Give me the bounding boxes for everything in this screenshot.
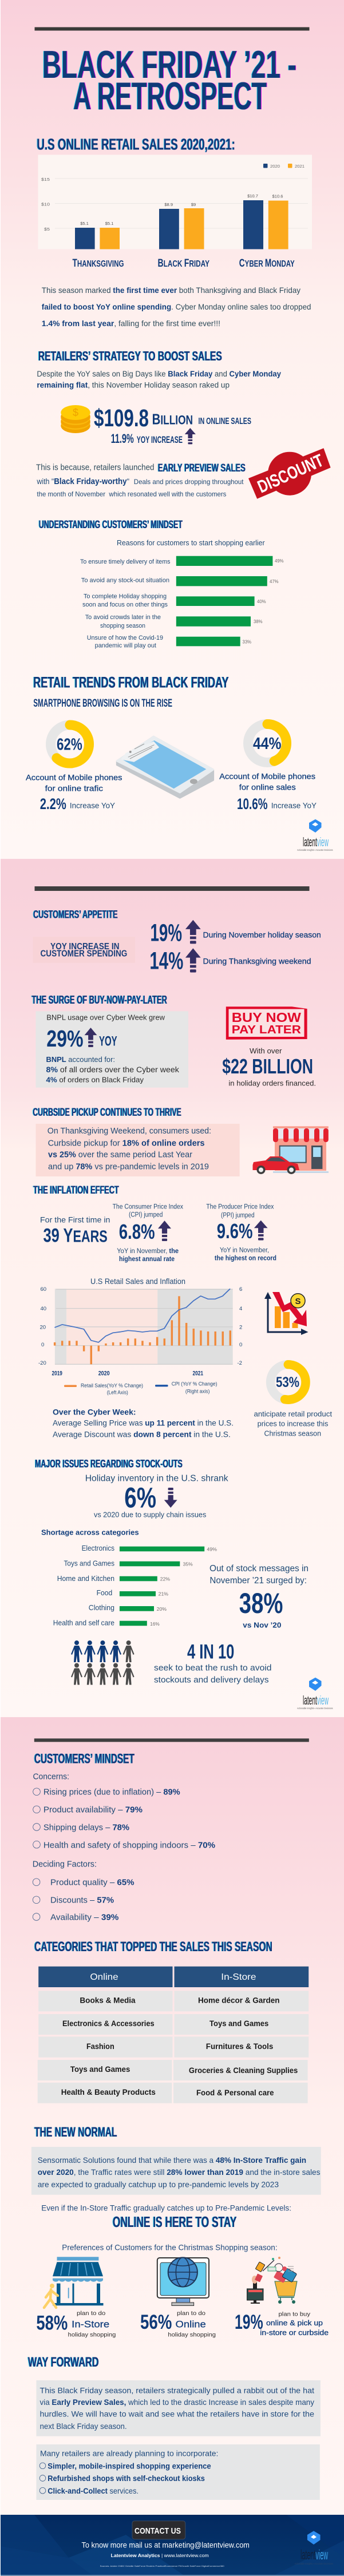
list: deciding factors: Deciding Factors: xyxy=(33,1860,97,1869)
panel: way forward xyxy=(28,2355,321,2500)
table xyxy=(38,1967,309,2103)
text panel: next Black Friday season. xyxy=(40,2422,127,2431)
stat: 19%: 19% xyxy=(150,919,182,946)
logo: latentview xyxy=(295,2531,333,2565)
bar chart: reasons: 33% xyxy=(243,640,251,645)
text: mobile sales: 10.6% xyxy=(237,795,268,813)
table: Groceries & Cleaning Supplies xyxy=(189,2066,298,2075)
list: concerns: Shipping delays – 78% xyxy=(44,1823,129,1832)
text panel: Curbside pickup for 18% of online orders xyxy=(48,1139,205,1148)
text panel: On Thanksgiving Weekend, consumers used: xyxy=(48,1127,211,1136)
text panel: retailer plans xyxy=(36,2444,320,2500)
text block: early preview sales: with "Black Friday-worthy" xyxy=(36,477,129,486)
list: concerns: Health and safety of shopping indoors – 70% xyxy=(44,1841,215,1850)
logo: latentview xyxy=(297,1678,333,1710)
callout: ONLINE IS HERE TO STAY xyxy=(113,2213,237,2230)
callout: YOY INCREASE IN xyxy=(50,942,119,952)
text panel xyxy=(31,2147,321,2195)
logo: latentview: Actionable Insights ▪ Accurate Decisions xyxy=(297,1707,333,1710)
bar chart: shortages: 22% xyxy=(160,1577,170,1582)
panel: categories table xyxy=(34,1939,309,2103)
text: mobile sales xyxy=(219,772,317,813)
table: Online xyxy=(90,1972,118,1982)
list: concerns xyxy=(33,1772,215,1850)
stat: 22 billion: $22 BILLION xyxy=(222,1055,313,1078)
table: Health & Beauty Products xyxy=(61,2087,156,2097)
text block: Despite the YoY sales on Big Days like Black Friday and Cyber Monday xyxy=(37,370,281,378)
legend xyxy=(263,164,305,169)
stat: 22 billion xyxy=(222,1047,316,1087)
table: Toys and Games xyxy=(209,2019,268,2028)
text: mobile traffic: 2.2% xyxy=(40,795,66,813)
stat: CPI xyxy=(113,1203,183,1263)
logo: latentview xyxy=(297,819,333,851)
stat: 19%: During November holiday season xyxy=(203,930,321,940)
text panel: retailer plans: Simpler, mobile-inspired shopping experience xyxy=(48,2462,211,2471)
legend: 2020 xyxy=(270,164,280,169)
logo: latentview: Actionable Insights ▪ Accurate Decisions xyxy=(295,2562,333,2565)
stat: 14% xyxy=(149,947,311,974)
text block: 1.4% from last year, falling for the first time ever!!! xyxy=(42,319,220,328)
stat: 109.8 billion: YOY INCREASE xyxy=(137,435,183,445)
text panel: YOY xyxy=(99,1033,117,1049)
text panel: retailer plans: Many retailers are already planning to incorporate: xyxy=(40,2448,218,2458)
bar chart: $5 xyxy=(44,227,50,232)
stat: out of stock messages: 38% xyxy=(239,1587,283,1619)
page background: section 1 xyxy=(1,0,344,859)
stat: 4 in 10: 4 IN 10 xyxy=(187,1640,234,1663)
bar chart: reasons xyxy=(80,556,284,649)
stat: pick up: 19% xyxy=(235,2311,263,2333)
panel: the new normal xyxy=(31,2125,329,2338)
donut: 62% xyxy=(50,725,89,763)
text panel: retailer plans: Click-and-Collect services. xyxy=(48,2486,139,2495)
heading: RETAIL TRENDS FROM BLACK FRIDAY xyxy=(33,673,229,691)
stat: 4 in 10: stockouts and delivery delays xyxy=(154,1676,269,1685)
stat: pick up: plan to buy xyxy=(278,2311,311,2317)
footer xyxy=(1,2515,344,2576)
text: mobile sales: for online sales xyxy=(239,782,296,791)
stat: out of stock messages xyxy=(209,1564,309,1629)
stat: 109.8 billion: $109.8 xyxy=(94,405,149,432)
page background: section 2 xyxy=(1,859,344,1717)
bar chart: CYBER MONDAY xyxy=(239,257,295,270)
text block: failed to boost YoY online spending. Cyber Monday online sales too dropped xyxy=(42,302,311,311)
stat: PPI: YoY in November, xyxy=(220,1247,269,1254)
icon: smartphone xyxy=(117,736,213,798)
bar chart: shortages: 20% xyxy=(157,1607,167,1612)
text block: This season marked the first time ever both Thanksgiving and Black Friday xyxy=(42,286,300,295)
logo: latentview: latentview xyxy=(303,1693,329,1707)
text panel: over 2020, the Traffic rates were still 28% lower than 2019 and the in-store sales xyxy=(38,2167,320,2177)
text panel: 29% xyxy=(46,1025,84,1052)
stat: pick up xyxy=(235,2311,329,2337)
text block: early preview sales xyxy=(36,462,246,498)
bar chart: $10.7 xyxy=(247,193,258,199)
table: Toys and Games xyxy=(70,2064,130,2074)
text panel: hurdles. We will have to wait and see what the retailers have in store for the xyxy=(40,2409,314,2419)
stat: CPI: 6.8% xyxy=(119,1220,155,1243)
bar chart: reasons: 47% xyxy=(270,579,279,584)
table: Fashion xyxy=(86,2042,114,2051)
donut: 44%: 44% xyxy=(253,735,282,753)
stat: inventory: vs 2020 due to supply chain issues xyxy=(94,1511,206,1519)
bar chart: shortages: Food xyxy=(97,1589,112,1597)
list: concerns: Concerns: xyxy=(33,1772,69,1781)
chart: retail sales and inflation: 0 xyxy=(239,1342,242,1348)
panel: buy now pay later xyxy=(32,993,316,1088)
text panel: 4% of orders on Black Friday xyxy=(46,1076,144,1084)
chart: retail sales and inflation: 6 xyxy=(239,1286,242,1293)
stat: PPI: The Producer Price Index xyxy=(206,1204,274,1211)
list: concerns: Rising prices (due to inflation) – 89% xyxy=(44,1788,180,1797)
bar chart: reasons: To avoid crowds later in the xyxy=(85,614,161,621)
stat: 39 years xyxy=(40,1215,110,1247)
chart: retail sales and inflation: 60 xyxy=(40,1286,46,1293)
text panel: via Early Preview Sales, which led to the drastic Increase in sales despite many xyxy=(40,2397,314,2407)
icon: falling chart with coin: S xyxy=(295,1297,301,1306)
button: contact us xyxy=(132,2521,185,2539)
legend: Retail Sales(YoY % Change) xyxy=(81,1382,143,1388)
text panel xyxy=(35,1011,188,1088)
stat: in-store: holiday shopping xyxy=(68,2331,116,2338)
bar chart: BLACK FRIDAY xyxy=(158,257,209,270)
chart: retail sales and inflation: 40 xyxy=(40,1306,46,1312)
text: cyber week xyxy=(53,1408,234,1438)
text panel: BNPL usage over Cyber Week grew xyxy=(46,1013,165,1022)
list: deciding factors: Discounts – 57% xyxy=(50,1896,114,1905)
stat: in-store: plan to do xyxy=(77,2310,105,2317)
stat: in-store xyxy=(36,2310,116,2338)
table: Furnitures & Tools xyxy=(206,2042,273,2051)
callout xyxy=(33,937,135,963)
stat: PPI: 9.6% xyxy=(217,1219,253,1243)
panel: retail trends xyxy=(26,673,333,851)
icon: discount stamp xyxy=(248,448,331,499)
subheading: SMARTPHONE BROWSING IS ON THE RISE xyxy=(33,697,172,710)
legend xyxy=(64,1381,218,1396)
donut: 62%: 62% xyxy=(57,736,82,754)
stat: CPI: YoY in November, the xyxy=(117,1248,179,1255)
bar chart: $5.1 xyxy=(105,221,113,226)
text: anticipate prices: Christmas season xyxy=(264,1429,321,1437)
bar chart: shortages: Clothing xyxy=(89,1604,114,1612)
text panel xyxy=(35,1124,240,1176)
heading: CUSTOMERS’ MINDSET xyxy=(34,1751,135,1767)
text block: early preview sales: Deals and prices dropping throughout xyxy=(134,478,244,486)
table: Home décor & Garden xyxy=(198,1996,279,2005)
bar chart xyxy=(38,154,312,270)
bar chart: shortages: Electronics xyxy=(82,1544,114,1552)
stat: inventory: 6% xyxy=(124,1481,156,1513)
heading: WAY FORWARD xyxy=(28,2355,99,2370)
donut: 53%: 53% xyxy=(276,1374,299,1390)
stat: out of stock messages: vs Nov ’20 xyxy=(243,1620,281,1629)
heading: THE NEW NORMAL xyxy=(34,2125,117,2140)
bar chart: $8.9 xyxy=(164,202,173,207)
bar chart: reasons: 40% xyxy=(257,599,266,604)
text panel: Sensormatic Solutions found that while there was a 48% In-Store Traffic gain xyxy=(38,2155,306,2165)
bar chart: reasons: 38% xyxy=(254,619,263,624)
stat: CPI: (CPI) jumped xyxy=(129,1212,163,1219)
chart: retail sales and inflation: -2 xyxy=(237,1360,242,1366)
chart: retail sales and inflation: 20 xyxy=(40,1325,46,1331)
text block: early preview sales: This is because, retailers launched xyxy=(36,463,155,473)
sources: Sources: Adobe CNBC Deloitte SaleForce Reuters PracticalEcommerce F5Growth SaleForce DigitalCommerce360 xyxy=(100,2565,224,2567)
icon: buy now pay later stamp: PAY LATER xyxy=(232,1023,301,1036)
stat: online: Online xyxy=(175,2319,206,2329)
chart: retail sales and inflation: 0 xyxy=(41,1342,44,1348)
company line: Latentview Analytics | www.latentview.com xyxy=(111,2553,209,2558)
text: anticipate prices: prices to increase this xyxy=(258,1420,328,1428)
icon: coin stack: $ xyxy=(73,407,78,418)
heading: U.S ONLINE RETAIL SALES 2020,2021: xyxy=(37,135,235,153)
stat: in-store: 58% xyxy=(36,2312,68,2335)
stat: 39 years: 39 YEARS xyxy=(44,1225,108,1247)
panel: customers' mindset xyxy=(33,1738,309,1923)
bar chart: $10.6 xyxy=(272,193,283,199)
bar chart: shortages: Home and Kitchen xyxy=(57,1575,114,1583)
icon: coin stack xyxy=(61,405,90,433)
icon: online shopping cart xyxy=(247,2257,297,2304)
bar chart: THANKSGIVING xyxy=(72,257,124,270)
icon: online monitor xyxy=(157,2257,209,2306)
legend: (Right axis) xyxy=(185,1388,209,1394)
icon: falling chart with coin xyxy=(264,1292,308,1335)
legend: CPI (YoY % Change) xyxy=(172,1381,218,1387)
heading: CURBSIDE PICKUP CONTINUES TO THRIVE xyxy=(33,1106,181,1119)
list: concerns: Product availability – 79% xyxy=(44,1806,143,1815)
chart: retail sales and inflation: 2020 xyxy=(98,1370,110,1377)
bar chart: shortages: Health and self care xyxy=(53,1619,114,1627)
legend: 2021 xyxy=(295,164,305,169)
bar chart: reasons: shopping season xyxy=(100,623,145,629)
text: mobile traffic: Account of Mobile phones xyxy=(26,772,122,782)
bar chart: reasons: To ensure timely delivery of items xyxy=(80,558,171,565)
text panel: BNPL accounted for: xyxy=(46,1055,115,1064)
bar chart: reasons: pandemic will play out xyxy=(95,643,156,649)
bar chart: reasons: 49% xyxy=(275,558,284,564)
text panel: and up 78% vs pre-pandemic levels in 2019 xyxy=(48,1162,209,1171)
stat: online: 56% xyxy=(140,2311,172,2333)
text: anticipate prices xyxy=(254,1410,333,1437)
text: mobile traffic xyxy=(26,772,122,813)
bar chart: $15 xyxy=(41,177,50,182)
stat: 109.8 billion: BILLION xyxy=(152,411,193,428)
panel: title header xyxy=(34,27,309,118)
stat: online: holiday shopping xyxy=(168,2331,216,2338)
panel: stock-outs xyxy=(35,1457,333,1710)
stat: 22 billion: in holiday orders financed. xyxy=(228,1079,316,1087)
stat: 14%: 14% xyxy=(149,947,183,974)
stat: CPI: The Consumer Price Index xyxy=(113,1203,183,1210)
legend: (Left Axis) xyxy=(107,1390,128,1396)
table: Electronics & Accessories xyxy=(62,2019,155,2028)
text panel: 8% of all orders over the Cyber week xyxy=(46,1065,179,1074)
text block: early preview sales: EARLY PREVIEW SALES xyxy=(158,462,246,474)
heading: THE SURGE OF BUY-NOW-PAY-LATER xyxy=(32,993,167,1006)
button: contact us: CONTACT US xyxy=(135,2526,181,2536)
text: mobile traffic: Increase YoY xyxy=(70,800,116,810)
stat: 22 billion: With over xyxy=(250,1047,282,1055)
icon: people pictogram xyxy=(71,1640,135,1685)
text: mobile sales: Account of Mobile phones xyxy=(219,772,315,781)
stat: 39 years: For the First time in xyxy=(40,1215,110,1224)
text panel: retailer plans: Refurbished shops with self-checkout kiosks xyxy=(48,2474,205,2483)
stat: out of stock messages: November ’21 surged by: xyxy=(209,1576,307,1586)
bar chart: shortages: 16% xyxy=(150,1622,160,1627)
text panel: vs 25% over the same period Last Year xyxy=(48,1151,192,1160)
icon: up arrow xyxy=(185,428,196,444)
text panel: are expected to gradually catchup up to pre-pandemic levels by 2023 xyxy=(38,2180,279,2189)
stat: 109.8 billion: IN ONLINE SALES xyxy=(198,417,251,426)
bar chart: reasons: To complete Holiday shopping xyxy=(84,593,167,600)
list: deciding factors: Product quality – 65% xyxy=(50,1879,135,1888)
stat: 4 in 10 xyxy=(154,1640,271,1685)
bar chart: shortages xyxy=(41,1528,217,1627)
table: Food & Personal care xyxy=(196,2088,274,2097)
text block: remaining flat, this November Holiday season raked up xyxy=(37,381,230,390)
table: Books & Media xyxy=(80,1996,136,2005)
text block xyxy=(37,370,281,390)
stat: PPI: the highest on record xyxy=(215,1255,276,1262)
donut: 53% xyxy=(271,1365,306,1400)
chart: retail sales and inflation: 2021 xyxy=(192,1370,203,1377)
stat: online: plan to do xyxy=(177,2310,205,2317)
logo: latentview: latentview xyxy=(303,835,329,849)
text: mobile sales: Increase YoY xyxy=(271,800,317,810)
list: deciding factors: Availability – 39% xyxy=(50,1913,119,1923)
chart title: Reasons for customers to start shopping earlier xyxy=(117,538,265,547)
logo: latentview: Actionable Insights ▪ Accurate Decisions xyxy=(297,849,333,851)
icon: buy now pay later stamp: BUY NOW xyxy=(232,1010,301,1025)
stat: 4 in 10: seek to beat the rush to avoid xyxy=(154,1663,271,1673)
text block: Even if the In-Store Traffic gradually catches up to Pre-Pandemic Levels: xyxy=(41,2203,291,2212)
stat: 109.8 billion xyxy=(94,405,251,446)
icon: in-store shop xyxy=(44,2257,103,2308)
panel: the inflation effect xyxy=(33,1184,333,1438)
stat: inventory xyxy=(85,1474,229,1519)
text: anticipate prices: anticipate retail product xyxy=(254,1410,333,1418)
subheading: Preferences of Customers for the Christmas Shopping season: xyxy=(62,2243,278,2252)
bar chart: shortages: 35% xyxy=(183,1562,193,1567)
panel: U.S online retail sales xyxy=(37,135,312,328)
chart: retail sales and inflation: 2019 xyxy=(52,1370,62,1377)
panel: customers' appetite xyxy=(33,886,321,974)
table: In-Store xyxy=(221,1972,256,1982)
stat: PPI: (PPI) jumped xyxy=(221,1212,255,1219)
heading: RETAILERS’ STRATEGY TO BOOST SALES xyxy=(38,348,222,363)
text panel: This Black Friday season, retailers strategically pulled a rabbit out of the hat xyxy=(40,2385,314,2395)
page background: section 3 xyxy=(1,1717,344,2515)
chart: retail sales and inflation xyxy=(38,1277,242,1396)
text: cyber week: Over the Cyber Week: xyxy=(53,1408,136,1417)
icon: buy now pay later stamp xyxy=(226,1006,307,1040)
stat: 14%: During Thanksgiving weekend xyxy=(203,957,311,966)
stat: out of stock messages: Out of stock messages in xyxy=(209,1564,309,1574)
bar chart: reasons: To avoid any stock-out situation xyxy=(81,577,169,584)
bar chart: reasons: soon and focus on other things xyxy=(82,601,168,608)
text: cyber week: Average Discount was down 8 percent in the U.S. xyxy=(53,1429,231,1438)
chart: retail sales and inflation: -20 xyxy=(38,1360,46,1366)
bar chart: reasons: Unsure of how the Covid-19 xyxy=(87,635,163,641)
heading: THE INFLATION EFFECT xyxy=(33,1184,119,1196)
bar chart: shortages: Shortage across categories xyxy=(41,1528,139,1536)
bar chart: $10 xyxy=(41,201,50,207)
chart title: U.S Retail Sales and Inflation xyxy=(90,1277,185,1286)
icon: storefront and car xyxy=(253,1126,329,1174)
panel: curbside pickup xyxy=(33,1106,329,1176)
stat: PPI xyxy=(206,1204,276,1262)
stat: pick up: online & pick up xyxy=(266,2319,323,2327)
panel: retailers' strategy xyxy=(36,348,331,499)
stat: 19% xyxy=(150,919,321,946)
logo: latentview: latentview xyxy=(300,2547,328,2563)
callout: CUSTOMER SPENDING xyxy=(40,949,127,959)
contact text: To know more mail us at marketing@latentview.com xyxy=(81,2541,250,2549)
bar chart: shortages: Toys and Games xyxy=(64,1560,114,1568)
list: deciding factors xyxy=(33,1860,135,1923)
heading: UNDERSTANDING CUSTOMERS’ MINDSET xyxy=(39,518,183,531)
bar chart: $5.1 xyxy=(80,221,89,226)
text block xyxy=(42,286,311,328)
donut: 44% xyxy=(248,724,286,762)
text: cyber week: Average Selling Price was up 11 percent in the U.S. xyxy=(53,1418,234,1428)
stat: pick up: in-store or curbside xyxy=(260,2329,329,2337)
bar chart: shortages: 21% xyxy=(159,1592,168,1596)
heading: CUSTOMERS’ APPETITE xyxy=(33,909,118,921)
panel: understanding customers' mindset xyxy=(39,518,284,649)
title xyxy=(42,43,296,118)
stat: inventory: Holiday inventory in the U.S. shrank xyxy=(85,1474,229,1484)
text panel xyxy=(36,2380,321,2436)
bar chart: shortages: 49% xyxy=(207,1547,217,1552)
chart: retail sales and inflation: 2 xyxy=(239,1325,242,1331)
chart: retail sales and inflation: 4 xyxy=(239,1306,242,1312)
text: mobile traffic: for online trafic xyxy=(45,783,103,792)
text block: early preview sales: the month of November which resonated well with the customers xyxy=(37,490,226,498)
heading: MAJOR ISSUES REGARDING STOCK-OUTS xyxy=(35,1457,183,1470)
stat: 109.8 billion: 11.9% xyxy=(111,431,134,446)
stat: in-store: In-Store xyxy=(72,2319,109,2329)
stat: online xyxy=(140,2310,216,2338)
bar chart: $9 xyxy=(191,202,196,207)
stat: CPI: highest annual rate xyxy=(119,1256,175,1263)
